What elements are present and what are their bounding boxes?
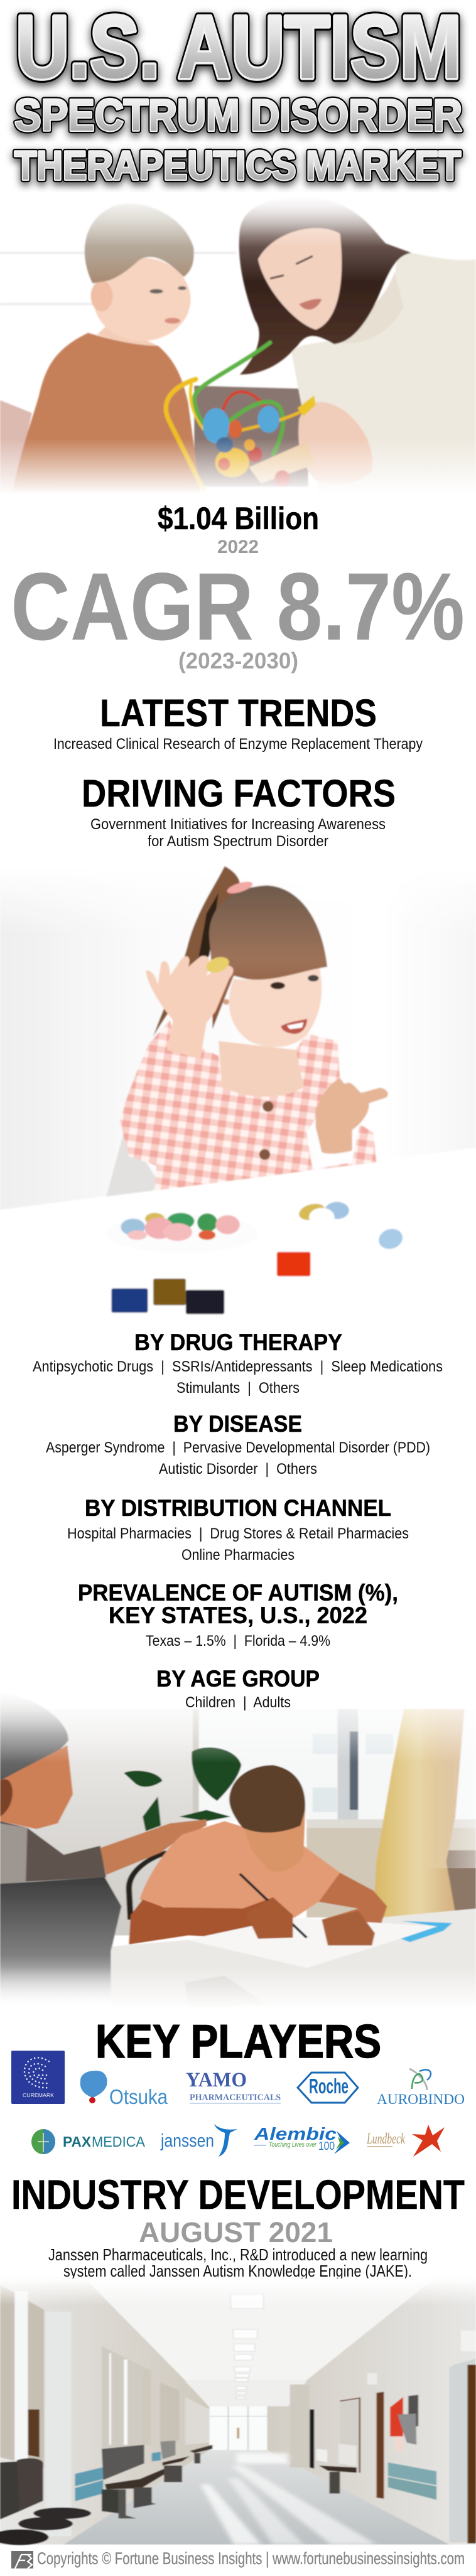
logo: Curemark [11,2051,65,2104]
ceiling lights [230,2294,264,2399]
paint jars [111,1252,311,1314]
notebook [187,1918,437,1968]
boy hair [85,203,194,283]
logo: Curemark: CUREMARK [23,2093,55,2098]
logo: Paxmedica [31,2129,146,2154]
heading: BY AGE GROUP [156,1666,320,1692]
girl neck [219,1041,303,1097]
boy [129,1765,387,1945]
girl dress [120,1020,376,1191]
dress buttons [259,1101,274,1160]
body: for Autism Spectrum Disorder [148,833,328,850]
logo: Otsuka: Otsuka [109,2085,168,2108]
segments: Online Pharmacies [181,1547,295,1564]
fades [0,1687,476,2029]
logo: Yamo Pharmaceuticals: YAMO [186,2069,247,2091]
state figures: Texas – 1.5% | Florida – 4.9% [146,1633,330,1650]
woman face [258,228,342,330]
section: industry development [11,2171,465,2280]
plants [124,1747,241,1831]
logo: Aurobindo [377,2069,465,2107]
loose eggs [297,1201,406,1252]
chair [129,1852,167,1919]
section: driving factors [82,772,396,850]
description: system called Janssen Autism Knowledge Engine (JAKE). [63,2262,412,2280]
value: $1.04 Billion: $1.04 Billion [158,501,319,536]
right wall pad [388,2462,436,2485]
CAGR period: (2023-2030) [178,648,298,674]
left benches [0,2440,212,2545]
heading: BY DRUG THERAPY [134,1329,342,1355]
logo: Otsuka [80,2071,168,2108]
heading: BY DISEASE [173,1411,302,1437]
heading: DRIVING FACTORS [82,772,396,815]
value year: 2022 [217,537,259,557]
left window bays [0,2285,210,2536]
footer logo [11,2551,33,2568]
bowl of eggs [106,1213,258,1253]
woman hand [298,402,372,484]
right wall elements [290,2331,476,2543]
logo: Lundbeck: Lundbeck [366,2131,405,2147]
curtain [374,1709,465,1918]
end doors and frame [210,2407,267,2450]
body: Increased Clinical Research of Enzyme Replacement Therapy [53,736,423,753]
section: by distribution channel [67,1495,409,1564]
extinguisher panel [390,2397,403,2437]
body [90,816,386,850]
section: by disease [46,1411,430,1478]
logo: Roche [298,2073,358,2103]
left wall pads [75,2452,161,2501]
body: Government Initiatives for Increasing Awareness [90,816,386,833]
table [109,1909,476,2007]
girl right hand [316,1078,388,1154]
bead toy [166,343,316,490]
logo: Yamo Pharmaceuticals [186,2069,281,2104]
section: key players [11,2015,465,2157]
heading: LATEST TRENDS [100,692,377,734]
pencil [240,1874,306,1938]
segments [46,1439,430,1478]
photo: boy writing with carer [0,1687,476,2029]
market value [158,501,319,557]
photo: boy and woman with bead toy [0,192,476,503]
woman sweater [291,250,476,493]
hands on notebook [246,1897,375,1945]
heading [78,1580,398,1628]
fade top and bottom [0,192,476,503]
heading: PREVALENCE OF AUTISM (%), [78,1580,398,1606]
logo: Yamo Pharmaceuticals: PHARMACEUTICALS [190,2093,281,2103]
carer [0,1693,207,1884]
logo: Roche: Roche [309,2074,349,2098]
segments [67,1525,409,1564]
section: by drug therapy [33,1329,443,1397]
boy shirt [12,333,200,493]
heading: KEY PLAYERS [95,2015,381,2068]
logo: Alembic: Alembic [254,2124,337,2144]
photo: hospital corridor [0,2278,476,2545]
logo: Alembic: Touching Lives over [269,2141,317,2149]
boy neck and face [91,258,191,346]
girl head [209,879,327,1047]
segments: Hospital Pharmacies | Drug Stores & Retail Pharmacies [67,1525,409,1542]
logo: Aurobindo: AUROBINDO [377,2091,465,2107]
segments [33,1358,443,1397]
logo: Janssen [160,2124,237,2157]
logo: Paxmedica: MEDICA [92,2133,146,2150]
description [48,2245,428,2280]
segments: Asperger Syndrome | Pervasive Developmental Disorder (PDD) [46,1439,430,1456]
title [14,0,462,188]
top fade [0,2278,476,2305]
laptop [0,1877,121,2007]
heading: BY DISTRIBUTION CHANNEL [85,1495,391,1521]
logo: Janssen: janssen [160,2131,214,2151]
section: latest trends [53,692,423,753]
girl raised hand [146,954,234,1059]
woman hair [239,196,411,375]
date: AUGUST 2021 [139,2216,333,2248]
segments: Stimulants | Others [176,1380,300,1397]
girl ponytail [153,866,240,1036]
photo: girl with coloured eggs [0,866,476,1331]
section: prevalence of autism [78,1580,398,1650]
logo: Alembic: 100 [318,2140,335,2152]
segments: Autistic Disorder | Others [159,1461,317,1478]
logo: Alembic [254,2124,350,2154]
logo: Paxmedica: PAX [63,2133,92,2150]
segments: Antipsychotic Drugs | SSRIs/Antidepressants | Sleep Medications [33,1358,443,1375]
footer [11,2549,465,2568]
heading: KEY STATES, U.S., 2022 [109,1602,367,1628]
brochure rack [408,2395,418,2428]
logo: Lundbeck [366,2125,445,2157]
floor light streaks [200,2453,376,2545]
segments: Children | Adults [185,1694,291,1711]
section: by age group [156,1666,320,1711]
